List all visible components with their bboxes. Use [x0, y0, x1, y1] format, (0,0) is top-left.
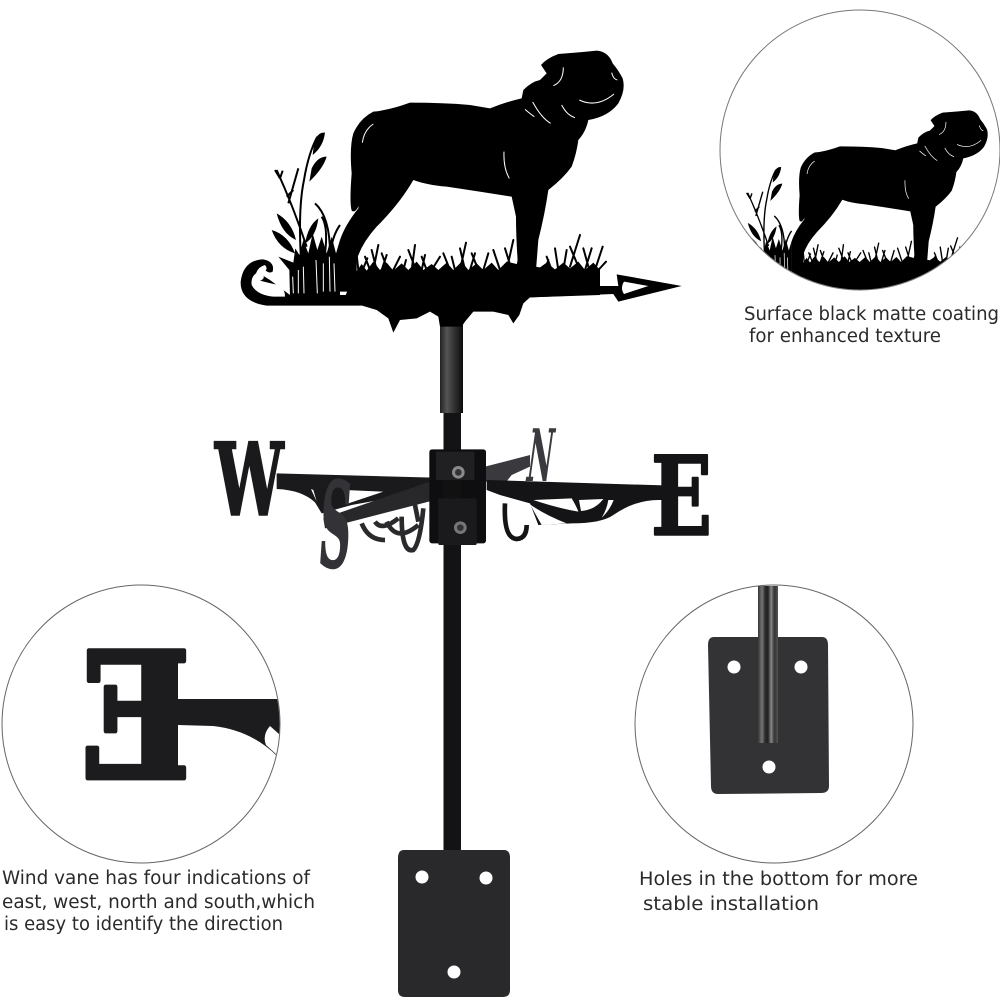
pole on plate	[758, 586, 778, 743]
north arm and letter	[485, 414, 559, 499]
mounting plate	[398, 850, 510, 997]
west arm	[277, 473, 435, 513]
hub bracket	[429, 449, 486, 545]
caption: installation holes: Holes in the bottom for more	[639, 869, 918, 890]
north arm and letter: N	[522, 414, 559, 499]
caption: surface coating: Surface black matte coating	[744, 304, 999, 325]
caption: four directions	[2, 868, 315, 935]
panel: letter E detail circle	[2, 585, 280, 863]
caption: installation holes: stable installation	[643, 894, 819, 915]
mounting plate with holes	[708, 637, 829, 794]
south filigree	[362, 502, 423, 550]
letter W: W	[214, 423, 285, 538]
caption: surface coating	[744, 304, 999, 347]
arrow rod and scroll	[241, 259, 682, 306]
caption: four directions: east, west, north and south,which	[2, 892, 315, 913]
caption: installation holes	[639, 869, 918, 915]
south arm	[323, 481, 435, 528]
mirrored letter E with arm: E	[80, 614, 191, 819]
panel: matte coating detail circle	[720, 10, 1000, 305]
letter S: S	[315, 457, 356, 594]
caption: surface coating: for enhanced texture	[749, 326, 941, 347]
letter E: E	[651, 432, 712, 561]
compass arms	[214, 414, 712, 594]
pole	[440, 325, 463, 855]
dog silhouette close-up	[744, 110, 988, 305]
dog weather vane top with arrow	[241, 51, 682, 333]
panel: mounting plate detail circle	[635, 585, 913, 863]
caption: four directions: is easy to identify the direction	[4, 914, 283, 935]
caption: four directions: Wind vane has four indications of	[2, 868, 310, 889]
mirrored letter E with arm	[86, 648, 280, 780]
east arm with filigree	[487, 480, 672, 525]
